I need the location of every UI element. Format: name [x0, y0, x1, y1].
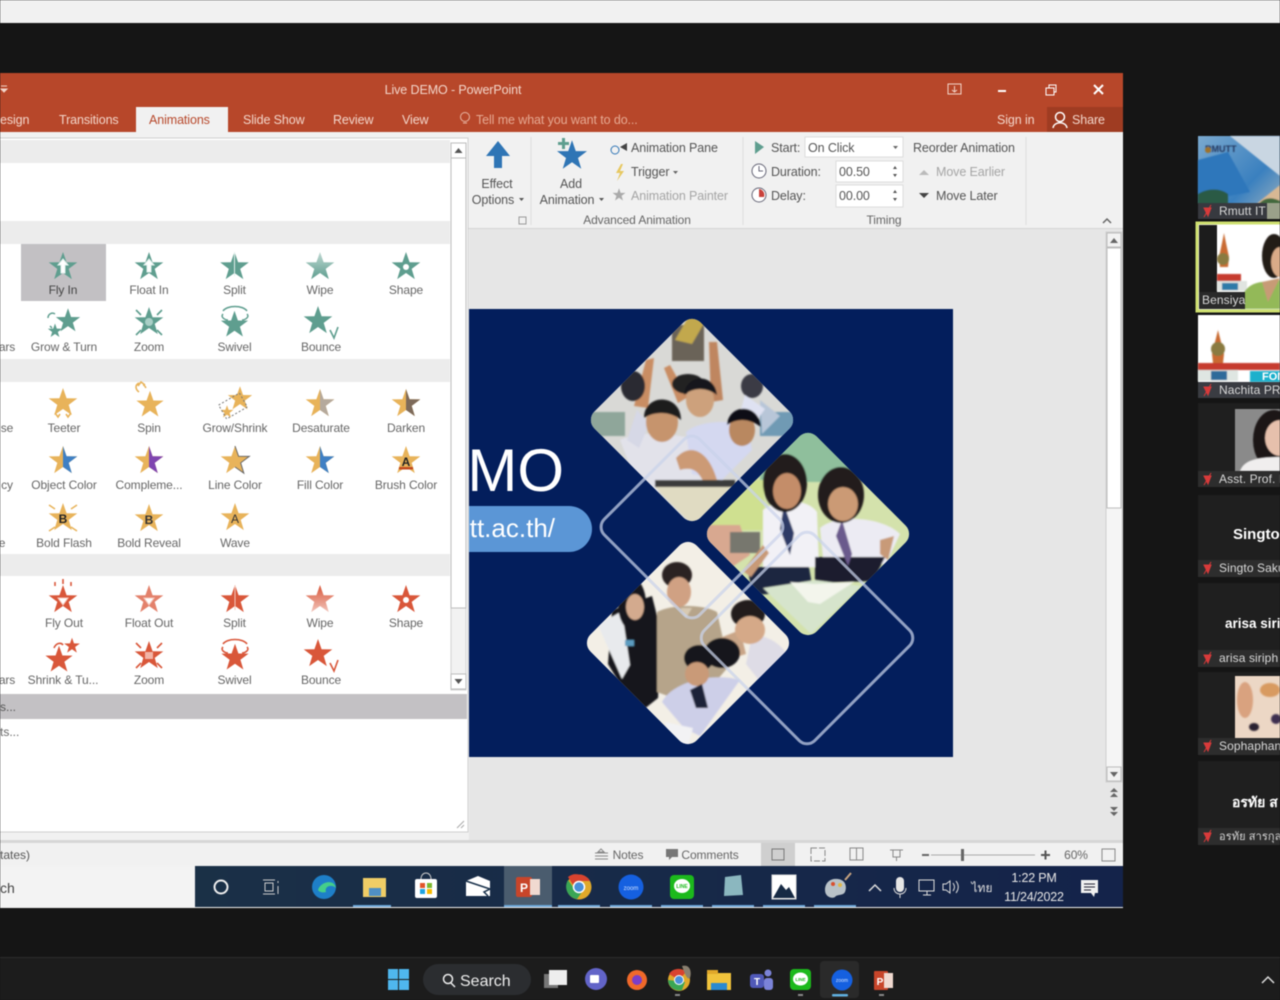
tile: Thai name: อรทัย สารกุล: [1219, 831, 1280, 843]
ribbon: advanced animation: Animation: [540, 193, 594, 207]
tile: Rmutt IT: RMUTT: [1205, 144, 1237, 154]
ribbon: timing: Timing: [867, 213, 901, 227]
slide workspace: [469, 229, 1123, 841]
animation gallery panel: [0, 138, 468, 832]
ribbon tabs: Share: [1072, 113, 1105, 127]
pinned app icons: zoom: [836, 978, 848, 984]
ribbon tabs: View: [402, 113, 430, 127]
search box: ch: [0, 880, 15, 896]
exit animations: Zoom: [134, 673, 164, 687]
ribbon: timing: [531, 137, 1111, 227]
status bar: Notes: [613, 848, 644, 862]
taskbar icons: LINE: [676, 884, 688, 890]
ribbon: advanced animation: [540, 138, 728, 227]
ribbon tabs: Tell me what you want to do...: [476, 113, 638, 127]
pinned app icons: T: [754, 977, 760, 988]
emphasis animations: cy: [1, 478, 13, 492]
start button: [388, 969, 409, 990]
entrance animations: Bounce: [301, 340, 341, 354]
exit animations: Float Out: [125, 616, 174, 630]
emphasis animations: Line Color: [208, 478, 262, 492]
ribbon: effect options: Options: [472, 193, 514, 207]
emphasis animations: Spin: [137, 421, 161, 435]
tile: Asst. Prof.: [1198, 403, 1280, 487]
taskbar icons: P: [520, 881, 528, 895]
ribbon: timing: On Click: [808, 141, 855, 155]
exit animations: [0, 579, 424, 687]
tile: Sophaphan (cat): Sophaphan: [1219, 739, 1280, 753]
entrance animations: Shape: [389, 283, 424, 297]
windows taskbar inside share: [0, 866, 1123, 907]
tile: Singto: [1198, 495, 1280, 577]
emphasis animations: Bold Reveal: [117, 536, 181, 550]
url pill: tt.ac.th/: [470, 513, 556, 543]
ribbon tabs: Review: [333, 113, 374, 127]
exit animations: Wipe: [307, 616, 334, 630]
tile: Rmutt IT: Rmutt IT: [1219, 204, 1266, 218]
slide heading: MO: [467, 437, 564, 504]
status bar: tates): [0, 848, 30, 862]
pinned app icons: [544, 961, 893, 998]
pinned app icons: LINE: [795, 977, 806, 982]
tile: Nachita PR: [1198, 315, 1280, 398]
entrance animations: Swivel: [217, 340, 252, 354]
gallery scrollbar: [451, 143, 466, 690]
section header bars: [0, 140, 450, 576]
entrance animations: Grow & Turn: [31, 340, 97, 354]
url pill: [468, 505, 593, 553]
emphasis animations: Wave: [220, 536, 250, 550]
ribbon: advanced animation: Add: [560, 177, 582, 191]
search box: [0, 866, 195, 907]
ribbon: timing: Delay:: [771, 189, 806, 203]
system tray: ไทย: [971, 881, 992, 895]
exit animations: Shape: [389, 616, 424, 630]
tile: Bensiya (active speaker): [1197, 223, 1280, 311]
emphasis animations: A: [402, 455, 411, 469]
emphasis animations: Compleme...: [116, 478, 182, 492]
entrance animations: Float In: [129, 283, 169, 297]
system tray: 1:22 PM: [1011, 871, 1057, 885]
emphasis animations: Darken: [387, 421, 425, 435]
ribbon: timing: Move Earlier: [936, 165, 1005, 179]
workspace scrollbar: [1106, 232, 1122, 816]
ribbon tabs: Slide Show: [243, 113, 306, 127]
emphasis animations: Grow/Shrink: [203, 421, 269, 435]
tile: arisa: arisa siri: [1225, 616, 1280, 631]
gallery footer menu: ts...: [0, 725, 19, 739]
ribbon tabs: Animations: [149, 113, 210, 127]
entrance animations: Wipe: [307, 283, 334, 297]
entrance animations: Zoom: [134, 340, 164, 354]
exit animations: Bounce: [301, 673, 341, 687]
selected: Fly In: [21, 244, 106, 301]
title bar: Live DEMO - PowerPoint: [385, 83, 522, 97]
ribbon: effect options: [472, 141, 526, 224]
entrance animations: [0, 252, 424, 354]
gallery footer menu: [0, 694, 467, 828]
ribbon tabs: Transitions: [59, 113, 119, 127]
photo: students raising hands: [585, 314, 800, 525]
top browser strip: [0, 0, 1280, 23]
status bar: [0, 840, 1123, 866]
gallery footer menu: s...: [0, 700, 16, 714]
tile: Rmutt IT: [1198, 136, 1280, 219]
tile: Thai name: อรทัย ส: [1232, 794, 1278, 810]
emphasis animations: Teeter: [48, 421, 80, 435]
tile: Nachita PR: Nachita PR: [1219, 383, 1280, 397]
status bar: Comments: [681, 848, 739, 862]
system tray: [869, 871, 1098, 904]
tile: Sophaphan (cat): [1198, 672, 1280, 755]
exit animations: Split: [223, 616, 247, 630]
ribbon: advanced animation: Animation Pane: [631, 141, 718, 155]
emphasis animations: se: [1, 421, 14, 435]
exit animations: Swivel: [217, 673, 252, 687]
ribbon: timing: 00.50: [839, 165, 870, 179]
emphasis animations: B: [145, 513, 154, 527]
status bar: 60%: [1064, 848, 1088, 862]
emphasis animations: B: [59, 512, 68, 526]
emphasis animations: Brush Color: [375, 478, 437, 492]
chevron: [1262, 977, 1274, 983]
system tray: 11/24/2022: [1004, 890, 1064, 904]
emphasis animations: A: [231, 512, 239, 526]
ribbon: advanced animation: Advanced Animation: [583, 213, 691, 227]
ribbon: effect options: Effect: [481, 177, 513, 191]
entrance animations: Fly In: [49, 283, 77, 297]
zoom participant sidebar: [1197, 136, 1280, 845]
emphasis animations: Object Color: [31, 478, 97, 492]
ribbon: timing: 00.00: [839, 189, 870, 203]
photo: teacher and students: [580, 535, 795, 750]
tile: Bensiya (active speaker): Bensiya: [1202, 293, 1246, 307]
emphasis animations: [0, 382, 437, 550]
half-colored stars: [320, 389, 334, 416]
title bar: [0, 73, 1123, 132]
emphasis animations: Bold Flash: [36, 536, 92, 550]
ribbon: advanced animation: Trigger: [631, 165, 669, 179]
ribbon tabs: Sign in: [997, 113, 1035, 127]
decorative diamond outlines: [597, 432, 917, 748]
PowerPoint window: [0, 73, 1123, 908]
taskbar icons: zoom: [624, 886, 638, 892]
entrance animations: Split: [223, 283, 247, 297]
exit animations: Shrink & Tu...: [28, 673, 98, 687]
ribbon: advanced animation: Animation Painter: [631, 189, 728, 203]
search pill: Search: [460, 973, 511, 990]
host windows 11 taskbar: [0, 957, 1280, 1000]
search pill: [423, 964, 531, 995]
taskbar icons: [214, 866, 856, 907]
ribbon tabs: esign: [0, 113, 30, 127]
tile: arisa: arisa siriph: [1219, 651, 1278, 665]
ribbon: timing: Move Later: [936, 189, 998, 203]
ribbon: timing: Reorder Animation: [913, 141, 1015, 155]
emphasis animations: Fill Color: [297, 478, 343, 492]
pinned app icons: P: [877, 977, 884, 988]
ribbon: timing: Start:: [771, 141, 800, 155]
tile: arisa: [1198, 583, 1280, 667]
photo: girls reading: [700, 430, 915, 640]
emphasis animations: Desaturate: [292, 421, 350, 435]
tile: Thai name: [1198, 761, 1280, 845]
exit animations: Fly Out: [45, 616, 84, 630]
ribbon: timing: Duration:: [771, 165, 821, 179]
ribbon tabs: [0, 107, 1123, 132]
slide: [468, 308, 954, 758]
